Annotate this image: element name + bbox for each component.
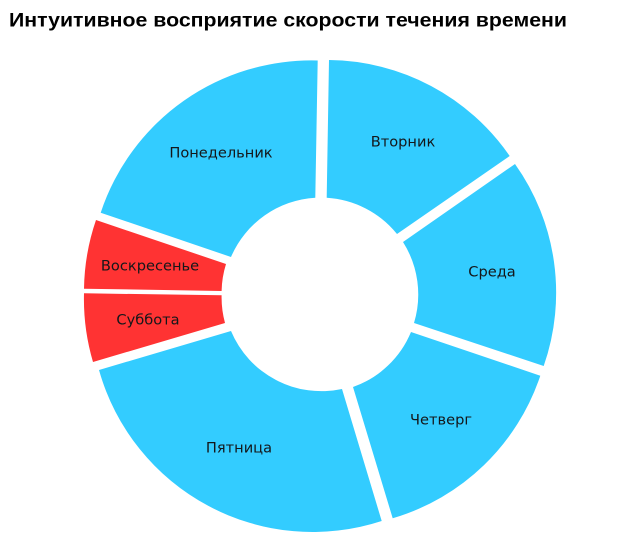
segment: Понедельник [101,60,318,257]
segment: Четверг [353,332,540,518]
segment: Среда: Среда [468,264,516,280]
segment: Суббота: Суббота [116,312,180,328]
donut chart [84,60,556,532]
segment: Среда [403,164,556,366]
segment: Пятница: Пятница [206,440,272,456]
segment: Воскресенье: Воскресенье [101,258,199,274]
segment: Пятница [99,331,382,532]
segment: Воскресенье [84,220,226,291]
segment: Вторник [327,60,510,234]
segment: Понедельник: Понедельник [169,144,273,162]
title: Интуитивное восприятие скорости течения времени [9,10,567,32]
segment: Четверг: Четверг [410,412,472,428]
segment: Суббота [84,293,225,362]
segment: Вторник: Вторник [371,134,435,150]
